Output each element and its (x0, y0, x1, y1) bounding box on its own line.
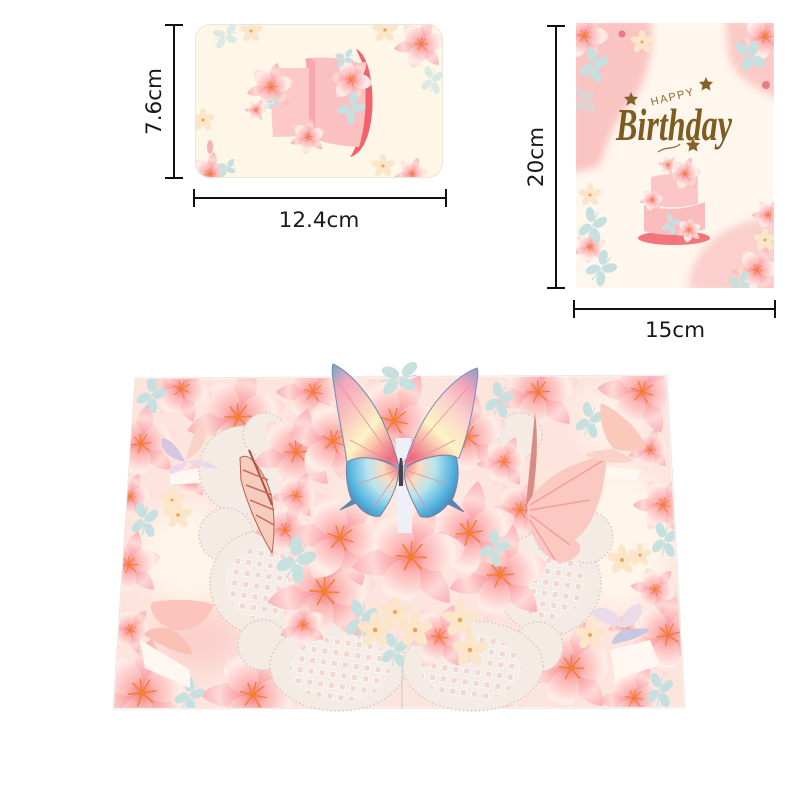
dimension: 20cm height: 20cm (524, 127, 549, 187)
side butterfly left (240, 450, 274, 553)
panel: open pop-up card (112, 362, 686, 712)
small butterfly top left (162, 420, 218, 474)
small butterfly top right (585, 403, 646, 463)
heading: Happy Birthday lettering (615, 77, 732, 152)
floral background sheet (114, 376, 684, 708)
icon: corner florals on small card (195, 24, 443, 178)
central lily bouquet (243, 350, 563, 681)
heading: Happy Birthday lettering: Birthday (615, 99, 732, 150)
main blue and pink butterfly (332, 364, 478, 517)
centre white pop-up strip (396, 438, 412, 533)
cake turned sideways (271, 49, 373, 157)
white pop-up tabs (140, 465, 660, 688)
dimension: 15cm width (574, 300, 775, 343)
panel: birthday card front (576, 23, 774, 288)
dimension: 15cm width: 15cm (645, 318, 705, 343)
icon: corner florals on birthday card (576, 23, 774, 288)
heading: Happy Birthday lettering: HAPPY (650, 86, 696, 109)
dimension: 7.6cm height: 7.6cm (142, 68, 167, 135)
dimension: 12.4cm width: 12.4cm (279, 208, 359, 233)
wing veins (340, 385, 470, 512)
icon: lily flowers on small card (245, 48, 372, 154)
cake illustration (637, 151, 710, 245)
lower right wing (404, 455, 464, 517)
upper right wing (404, 368, 478, 467)
dimension: 20cm height (524, 26, 565, 288)
dimension: 12.4cm width (194, 189, 446, 233)
panel: small card back with cake (195, 24, 443, 178)
upper left wing (332, 364, 399, 467)
butterfly body (399, 458, 403, 486)
small butterfly bottom right (591, 604, 650, 644)
dimension: 7.6cm height (142, 25, 183, 178)
small butterfly bottom left (144, 600, 214, 654)
lower left wing (340, 458, 398, 516)
background lilies (114, 368, 682, 708)
marbled pink washes (570, 18, 780, 295)
lace doily left and right (199, 413, 613, 711)
side butterfly right (525, 412, 607, 562)
